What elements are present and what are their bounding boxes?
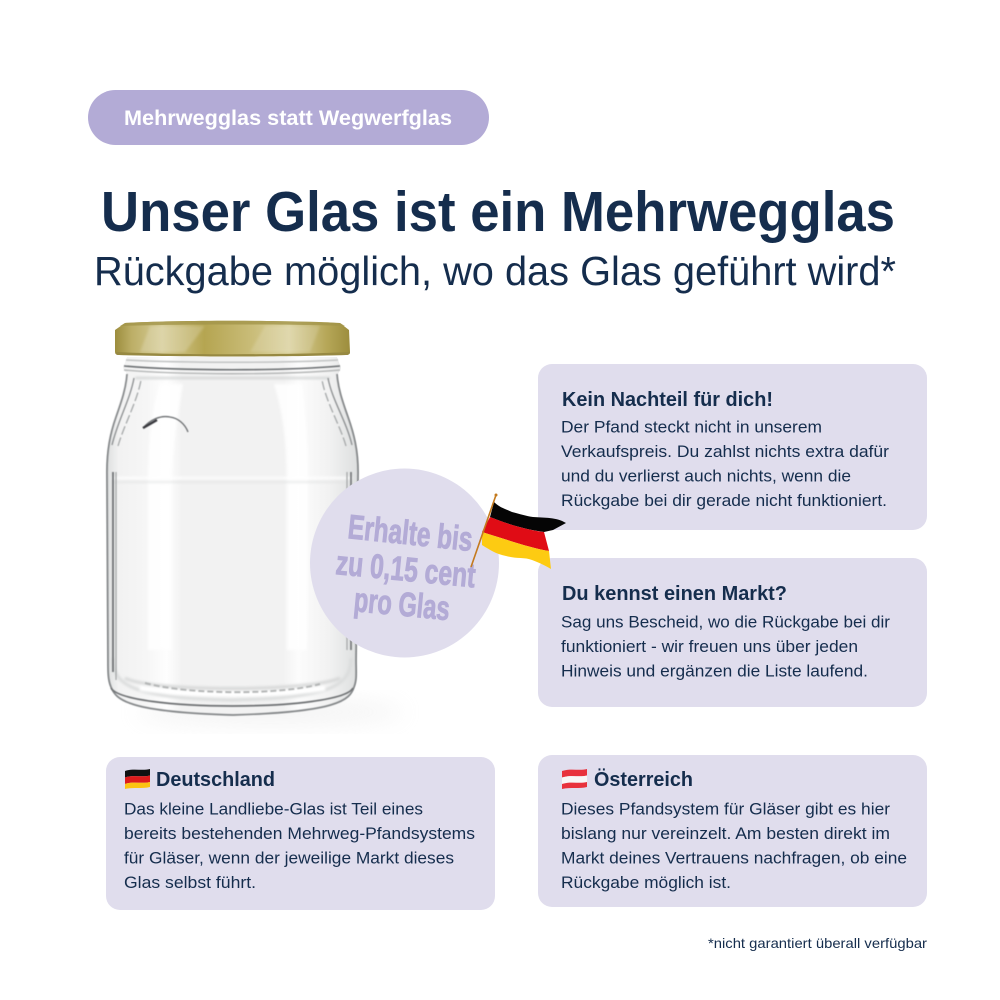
panel: Österreich: Rückgabe möglich ist. bbox=[561, 873, 731, 892]
panel: kein Nachteil: und du verlierst auch nichts, wenn die bbox=[561, 466, 851, 486]
panel: kein Nachteil: Rückgabe bei dir gerade nicht funktioniert. bbox=[561, 491, 887, 510]
image: glass jar bbox=[106, 321, 405, 722]
panel: du kennst einen Markt: Du kennst einen Markt? bbox=[562, 582, 787, 605]
pill label bbox=[88, 90, 489, 145]
panel: Deutschland: Deutschland bbox=[156, 768, 275, 791]
icon: Austrian flag bbox=[562, 769, 587, 789]
panel: Deutschland bbox=[106, 757, 495, 910]
panel: du kennst einen Markt: Sag uns Bescheid, wo die Rückgabe bei dir bbox=[561, 612, 890, 632]
panel: Österreich: Markt deines Vertrauens nachfragen, ob eine bbox=[561, 848, 907, 868]
panel: kein Nachteil: Kein Nachteil für dich! bbox=[562, 388, 773, 411]
panel: Deutschland: für Gläser, wenn der jeweilige Markt dieses bbox=[124, 848, 454, 868]
panel: Deutschland: Das kleine Landliebe-Glas ist Teil eines bbox=[124, 800, 423, 818]
title: Unser Glas ist ein Mehrwegglas bbox=[101, 180, 895, 244]
panel: Österreich bbox=[538, 755, 927, 907]
panel: du kennst einen Markt bbox=[538, 558, 927, 707]
panel: Österreich: Österreich bbox=[594, 768, 693, 791]
panel: kein Nachteil bbox=[538, 364, 927, 530]
jar lid bbox=[115, 321, 350, 356]
panel: Deutschland: Glas selbst führt. bbox=[124, 873, 256, 892]
panel: Österreich: bislang nur vereinzelt. Am besten direkt im bbox=[561, 824, 890, 843]
panel: Deutschland: bereits bestehenden Mehrweg-Pfandsystems bbox=[124, 824, 475, 843]
callout: price badge bbox=[310, 468, 499, 658]
callout: price badge: pro Glas bbox=[352, 581, 451, 628]
footnote: *nicht garantiert überall verfügbar bbox=[708, 935, 927, 951]
panel: du kennst einen Markt: Hinweis und ergänzen die Liste laufend. bbox=[561, 662, 868, 680]
panel: du kennst einen Markt: funktioniert - wir freuen uns über jeden bbox=[561, 637, 858, 656]
panel: kein Nachteil: Verkaufspreis. Du zahlst nichts extra dafür bbox=[561, 442, 889, 461]
panel: kein Nachteil: Der Pfand steckt nicht in unserem bbox=[561, 418, 822, 436]
callout: price badge: Erhalte bis bbox=[346, 508, 474, 559]
icon: German flag bbox=[125, 769, 150, 789]
panel: Österreich: Dieses Pfandsystem für Gläser gibt es hier bbox=[561, 800, 890, 818]
icon: German flag on pole bbox=[471, 494, 566, 569]
callout: price badge: zu 0,15 cent bbox=[334, 544, 477, 595]
subtitle: Rückgabe möglich, wo das Glas geführt wird* bbox=[94, 248, 896, 294]
pill label: Mehrwegglas statt Wegwerfglas bbox=[124, 106, 452, 130]
